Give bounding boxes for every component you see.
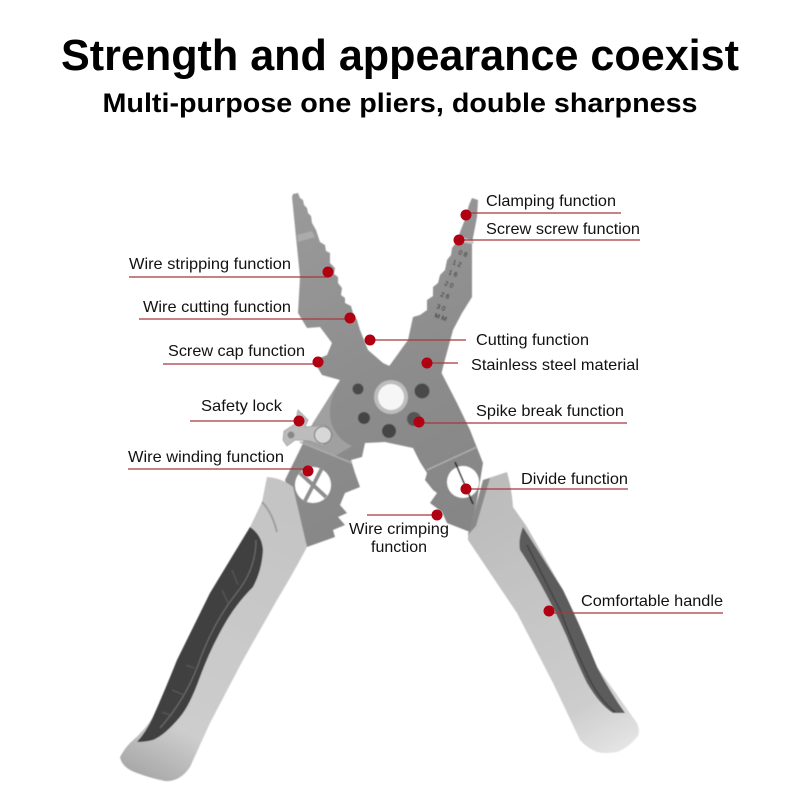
label: Cutting function bbox=[364, 332, 589, 349]
divide hole bbox=[447, 462, 479, 504]
label: Safety lock: Safety lock bbox=[201, 398, 283, 415]
label: Spike break function bbox=[414, 403, 627, 428]
label: Clamping function: Clamping function bbox=[486, 193, 616, 210]
label: Comfortable handle bbox=[544, 593, 723, 616]
jaw size markings: 2 0 bbox=[443, 280, 455, 290]
jaw size markings: 0 8 bbox=[457, 249, 469, 259]
label: Screw screw function bbox=[454, 221, 640, 246]
label: Wire stripping function: Wire stripping function bbox=[129, 256, 291, 273]
label: Safety lock bbox=[190, 398, 304, 426]
left grip bbox=[137, 527, 263, 742]
label: Divide function bbox=[460, 471, 628, 494]
safety lock bbox=[283, 410, 333, 446]
label: Wire winding function bbox=[128, 449, 314, 476]
label: Spike break function: Spike break function bbox=[476, 403, 624, 420]
jaw size markings: M M bbox=[433, 312, 448, 323]
label: Wire stripping function bbox=[129, 256, 334, 278]
label: Wire crimping function bbox=[349, 510, 449, 556]
title: Strength and appearance coexist bbox=[61, 31, 739, 80]
label: Screw screw function: Screw screw function bbox=[486, 221, 640, 238]
label: Wire cutting function: Wire cutting function bbox=[143, 299, 291, 316]
left handle bbox=[120, 477, 307, 781]
pivot rivet bbox=[374, 380, 408, 414]
label: Clamping function bbox=[460, 193, 621, 220]
jaw size markings: 1 6 bbox=[447, 269, 459, 279]
holes bbox=[352, 384, 364, 394]
label: Wire winding function: Wire winding function bbox=[128, 449, 284, 466]
label: Stainless steel material: Stainless steel material bbox=[471, 357, 639, 374]
jaw size markings: 3 0 bbox=[435, 303, 447, 313]
label: Screw cap function: Screw cap function bbox=[168, 343, 305, 360]
jaw size markings: 1 2 bbox=[451, 259, 463, 269]
central pivot plate bbox=[300, 380, 477, 470]
jaw size markings: 2 6 bbox=[439, 291, 451, 301]
label: Comfortable handle: Comfortable handle bbox=[581, 593, 723, 610]
lower steel behind handles bbox=[285, 370, 483, 547]
left jaw bbox=[292, 193, 410, 410]
wire winding hole bbox=[295, 467, 331, 503]
label: Wire crimping function: Wire crimping bbox=[349, 521, 449, 538]
jaw size markings bbox=[433, 249, 469, 323]
right grip bbox=[519, 527, 625, 713]
right jaw bbox=[380, 198, 478, 400]
label: Wire crimping function: function bbox=[371, 539, 427, 556]
label: Wire cutting function bbox=[139, 299, 356, 324]
subtitle: Multi-purpose one pliers, double sharpness bbox=[102, 88, 698, 118]
label: Divide function: Divide function bbox=[521, 471, 628, 488]
label: Screw cap function bbox=[163, 343, 324, 368]
right handle bbox=[468, 472, 639, 753]
label: Cutting function: Cutting function bbox=[476, 332, 589, 349]
jaw highlight bands bbox=[297, 231, 315, 242]
pliers illustration bbox=[120, 193, 639, 781]
